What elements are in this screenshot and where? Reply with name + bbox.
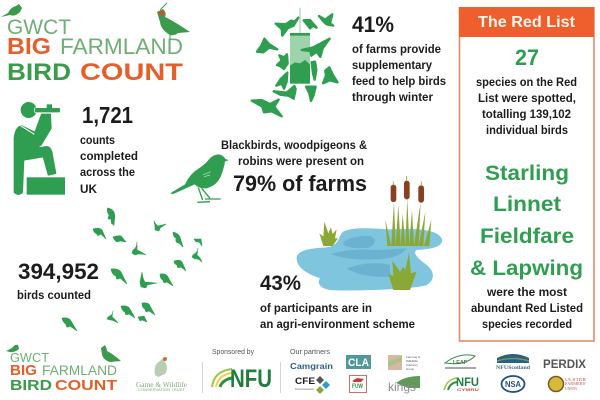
stat: counts completed: across the [80, 167, 135, 179]
stat: 27 species: 27 [515, 45, 539, 70]
icon: birdwatcher with binoculars [14, 102, 65, 195]
footer logo: NSA [502, 376, 524, 392]
footer logo: Game & Wildlife Conservation Trust [136, 357, 187, 392]
footer logo: CFE: Championing the Farmed Environment [295, 387, 314, 391]
species names: Fieldfare [480, 225, 574, 248]
footer logo: NFU Cymru: NFU [456, 375, 479, 389]
left grass clump [319, 222, 338, 246]
footer logo: FWAG: Farming & [406, 355, 420, 359]
footer logo: Game & Wildlife Conservation Trust: CONSERVATION TRUST [138, 388, 186, 392]
footer logo: LEAF [445, 355, 476, 368]
footer logo: LEAF: LEAF [453, 360, 467, 366]
stat: agri-environment scheme [260, 272, 415, 331]
footer logo: Kings [388, 376, 420, 394]
icon: bird feeder surrounded by birds [252, 8, 338, 116]
icon: small perched bird [1, 4, 22, 17]
icon: blackbird [170, 154, 229, 202]
footer logo: Big Farmland Bird Count: BIRD [10, 377, 52, 394]
most abundant note [471, 287, 583, 331]
footer logo: FUW [350, 376, 366, 392]
footer logo: FWAG: Advisory [406, 363, 419, 367]
footer logo: NFU Cymru [444, 375, 479, 392]
footer logo: CFE: CFE [295, 376, 315, 386]
footer logo: Kings: kings [388, 380, 416, 394]
footer logo: PERDIX: PERDIX [543, 357, 586, 371]
stat: 27 species: totalling 139,102 [482, 109, 571, 121]
footer logo: NSA: NSA [505, 380, 521, 389]
footer logo: NFU [212, 365, 272, 393]
footer logo: NFU Scotland [496, 354, 530, 371]
footer logo: CLA: CLA [348, 357, 369, 369]
stat: agri-environment scheme: 43% [260, 272, 301, 295]
divider [202, 362, 280, 393]
stat: counts completed: counts [80, 135, 115, 147]
species names: Linnet [493, 193, 561, 216]
footer logo: FWAG [388, 355, 420, 371]
footer logo: Ulster Farmers Union: FARMERS' [565, 381, 586, 386]
footer logo: Big Farmland Bird Count: GWCT [10, 350, 49, 365]
logo: GWCT Big Farmland Bird Count [1, 3, 190, 86]
footer logo: NFU Cymru: CYMRU [457, 387, 479, 392]
stat: 27 species: species on the Red [476, 77, 577, 89]
footer logo: Big Farmland Bird Count: FARMLAND [42, 362, 117, 378]
front grass clump [388, 253, 417, 290]
panel: The Red List [459, 7, 594, 341]
stat: 27 species [476, 45, 577, 137]
footer logo: Game & Wildlife Conservation Trust: Game & Wildlife [136, 381, 187, 389]
icon: lapwing [157, 3, 190, 39]
stat: 27 species: individual birds [486, 125, 568, 137]
footer logo: FWAG: Group [406, 367, 414, 371]
stat: birds counted: 394,952 [18, 259, 99, 284]
stat: counts completed: 1,721 [82, 102, 133, 128]
logo: GWCT Big Farmland Bird Count: BIG [7, 33, 51, 59]
footer logo: Camgrain: Camgrain [290, 361, 333, 371]
stat: agri-environment scheme: an agri-environment scheme [260, 319, 415, 331]
species names [470, 162, 583, 280]
stat: counts completed [80, 102, 138, 196]
stat: common birds: 79% of farms [233, 171, 367, 196]
stat: common birds: robins were present on [238, 156, 364, 168]
birds around feeder [252, 14, 338, 116]
reeds [385, 198, 431, 246]
stat: birds counted [17, 259, 99, 302]
stat: supplementary feed: supplementary [352, 60, 433, 72]
stat: birds counted: birds counted [17, 290, 91, 302]
footer logo: FWAG: Wildlife [406, 359, 418, 363]
footer logo: Ulster Farmers Union: UNION [565, 386, 577, 391]
footer logo: NFU Scotland: NFUScotland [496, 366, 530, 371]
stat: supplementary feed: feed to help birds [352, 76, 446, 88]
partners label: Our partners [290, 349, 331, 356]
stat: agri-environment scheme: of participants are in [260, 303, 372, 315]
footer logo: FUW: FUW [352, 384, 363, 390]
footer logo: Ulster Farmers Union [548, 376, 586, 392]
footer logo: CFE [295, 376, 330, 394]
logo: GWCT Big Farmland Bird Count: FARMLAND [60, 34, 183, 59]
stat: supplementary feed: of farms provide [352, 44, 441, 56]
footer logo: Ulster Farmers Union: ULSTER [565, 377, 586, 382]
stat: supplementary feed [352, 12, 446, 104]
logo: GWCT Big Farmland Bird Count: COUNT [80, 59, 183, 86]
icon: flock of birds [62, 208, 202, 331]
stat: supplementary feed: 41% [352, 12, 394, 37]
stat: 27 species: List were spotted, [478, 93, 576, 105]
stat: counts completed: completed [80, 151, 138, 163]
panel header [459, 7, 594, 37]
icon: pond with reeds [297, 176, 442, 291]
stat: supplementary feed: through winter [352, 92, 434, 104]
footer logo: Big Farmland Bird Count: BIG [10, 362, 37, 379]
species names: Starling [485, 162, 569, 185]
stat: common birds [221, 140, 367, 196]
logo: GWCT Big Farmland Bird Count: GWCT [7, 16, 71, 39]
footer logo: Big Farmland Bird Count [6, 345, 121, 394]
footer logo: NFU: NFU [230, 365, 272, 393]
stat: common birds: Blackbirds, woodpigeons & [221, 140, 367, 152]
footer logo: Big Farmland Bird Count: COUNT [55, 377, 117, 394]
most abundant note: species recorded [482, 319, 572, 331]
most abundant note: were the most [486, 287, 567, 299]
panel header: The Red List [478, 14, 576, 31]
most abundant note: abundant Red Listed [471, 303, 583, 315]
sponsor label: Sponsored by [212, 349, 254, 356]
logo: GWCT Big Farmland Bird Count: BIRD [7, 59, 71, 86]
stat: counts completed: UK [80, 184, 98, 196]
species names: & Lapwing [470, 257, 583, 280]
